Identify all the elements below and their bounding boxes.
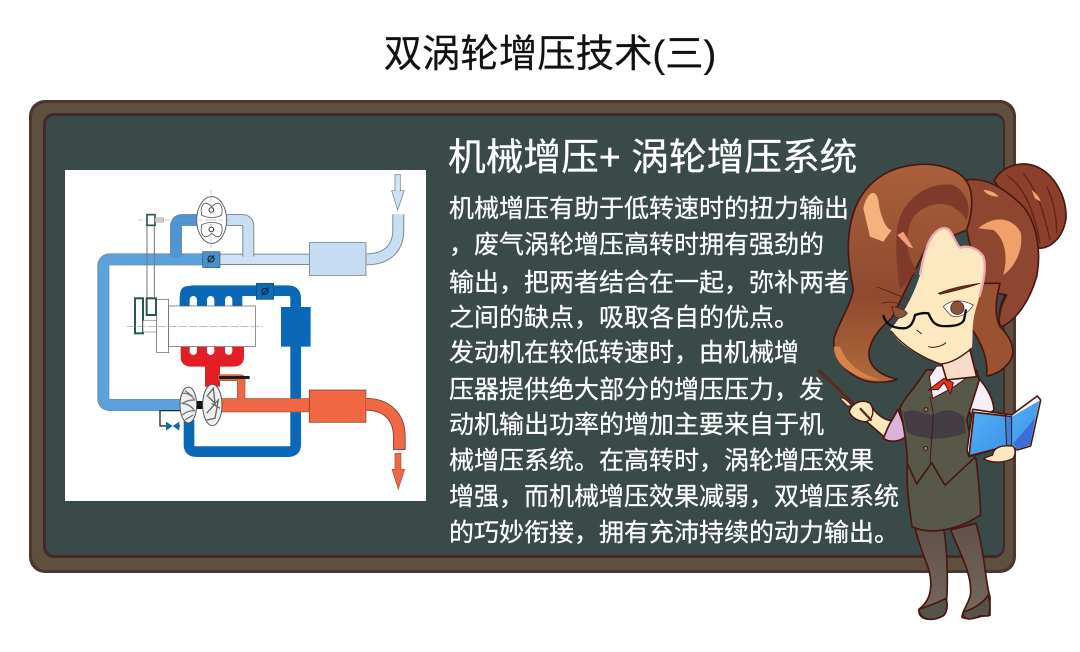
glasses	[883, 309, 966, 328]
pointer stick	[818, 370, 872, 421]
turbocharger	[196, 401, 204, 409]
right sleeve	[967, 375, 994, 425]
hair back and right	[967, 179, 1039, 327]
text block: description: 输出，把两者结合在一起，弥补两者	[449, 269, 849, 297]
skirt	[907, 458, 981, 531]
neck	[942, 350, 977, 380]
left sleeve	[883, 409, 907, 441]
diagram: turbo and supercharger piping	[103, 174, 405, 489]
text block: description: 增强，而机械增压效果减弱，双增压系统	[449, 483, 899, 511]
text block: description: 机械增压有助于低转速时的扭力输出	[449, 195, 849, 223]
mouth	[928, 343, 946, 347]
eye	[943, 301, 973, 317]
throttle valves	[203, 252, 220, 268]
engine block	[157, 299, 169, 353]
hand with pointer	[849, 401, 873, 422]
heading: 机械增压+ 涡轮增压系统	[448, 136, 857, 178]
vest	[900, 370, 979, 485]
jaw line	[891, 331, 972, 364]
supercharger	[197, 197, 227, 243]
text block: description: 压器提供绝大部分的增压压力，发	[449, 376, 824, 404]
text block: description: 动机输出功率的增加主要来自于机	[449, 411, 824, 439]
exhaust arrow	[392, 453, 405, 489]
cooled intake loop, dark blue	[185, 291, 296, 452]
text block: description: 之间的缺点，吸取各自的优点。	[449, 304, 799, 332]
hand on book	[983, 446, 1015, 462]
legs	[915, 527, 947, 619]
text block: description: ，废气涡轮增压高转时拥有强劲的	[449, 231, 824, 259]
left forearm	[849, 401, 907, 441]
exhaust pipe	[218, 375, 309, 412]
collar and tie	[929, 366, 967, 398]
panel: chalkboard	[29, 100, 1016, 573]
text block: description: 发动机在较低转速时，由机械增	[449, 339, 799, 367]
vest shading	[903, 410, 966, 439]
compressor pipe, mid blue	[103, 259, 205, 405]
panel: engine diagram	[65, 170, 426, 501]
text block: description	[449, 195, 899, 547]
eyebrow	[938, 283, 980, 294]
ear	[1000, 293, 1012, 325]
air filter	[309, 243, 366, 275]
teacher head	[834, 164, 1066, 382]
wastegate valve	[160, 411, 180, 426]
intercooler	[281, 307, 311, 347]
exhaust manifold	[181, 347, 244, 387]
right hair curl	[970, 283, 1013, 376]
book	[967, 396, 1041, 457]
text block: description: 的巧妙衔接，拥有充沛持续的动力输出。	[449, 519, 899, 547]
intake runners	[190, 296, 232, 309]
belt drive	[147, 215, 154, 303]
text block: description: 械增压系统。在高转时，涡轮增压效果	[449, 447, 874, 475]
hair shading	[896, 184, 969, 290]
hair left	[834, 164, 972, 382]
forehead hairline	[920, 228, 985, 297]
inlet arrow	[392, 174, 404, 210]
intake manifold	[180, 286, 242, 307]
teacher body	[818, 366, 1041, 619]
inlet pipe, light blue	[367, 214, 398, 259]
illustration: teacher character	[818, 164, 1066, 619]
title: 双涡轮增压技术(三)	[384, 33, 716, 76]
left eye	[892, 307, 907, 318]
hair bun	[994, 164, 1066, 248]
face	[890, 228, 985, 364]
shoes	[919, 598, 947, 619]
